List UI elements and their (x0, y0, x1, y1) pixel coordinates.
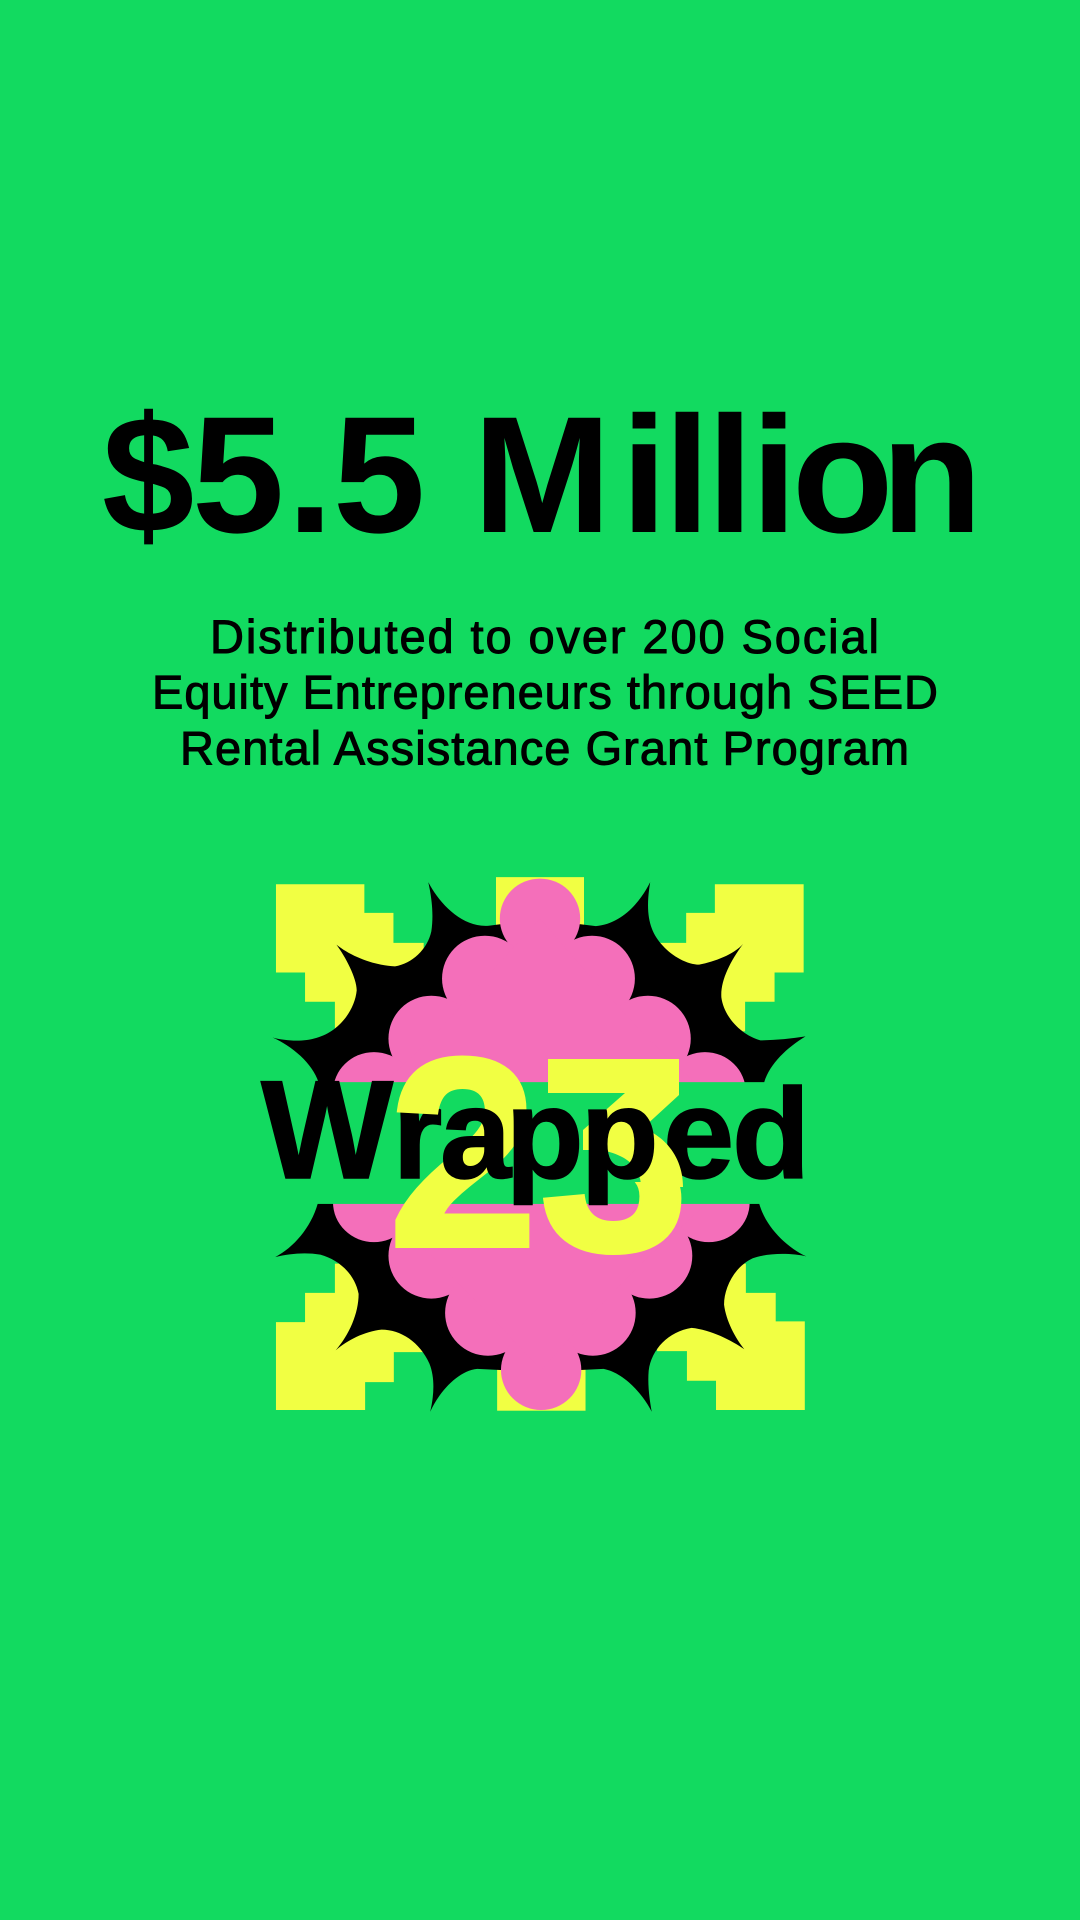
description text: Equity Entrepreneurs through SEED (152, 666, 938, 718)
wordmark: outer letters under numerals (261, 1051, 810, 1208)
infographic canvas (104, 408, 972, 1412)
green band (240, 1082, 840, 1204)
description text: Rental Assistance Grant Program (180, 722, 909, 774)
geometric artwork (240, 877, 840, 1412)
icon: yellow stepped corners (276, 877, 805, 1411)
icon: pink cloud (333, 879, 750, 1410)
numeral 23 (395, 1056, 683, 1255)
description text: Distributed to over 200 Social (210, 610, 879, 663)
wordmark: outer letters under numerals: W (261, 1051, 393, 1208)
numeral 23: 3 (539, 1007, 689, 1308)
numeral 23: 2 (388, 1003, 538, 1304)
title: $5.5 Million (102, 383, 982, 568)
wordmark: inner letters over numerals: app (440, 1063, 659, 1206)
Wrapped 23 badge (240, 877, 840, 1412)
icon: black starburst (273, 882, 806, 1412)
wordmark: outer letters under numerals: red (392, 1063, 810, 1206)
description text (152, 610, 938, 774)
